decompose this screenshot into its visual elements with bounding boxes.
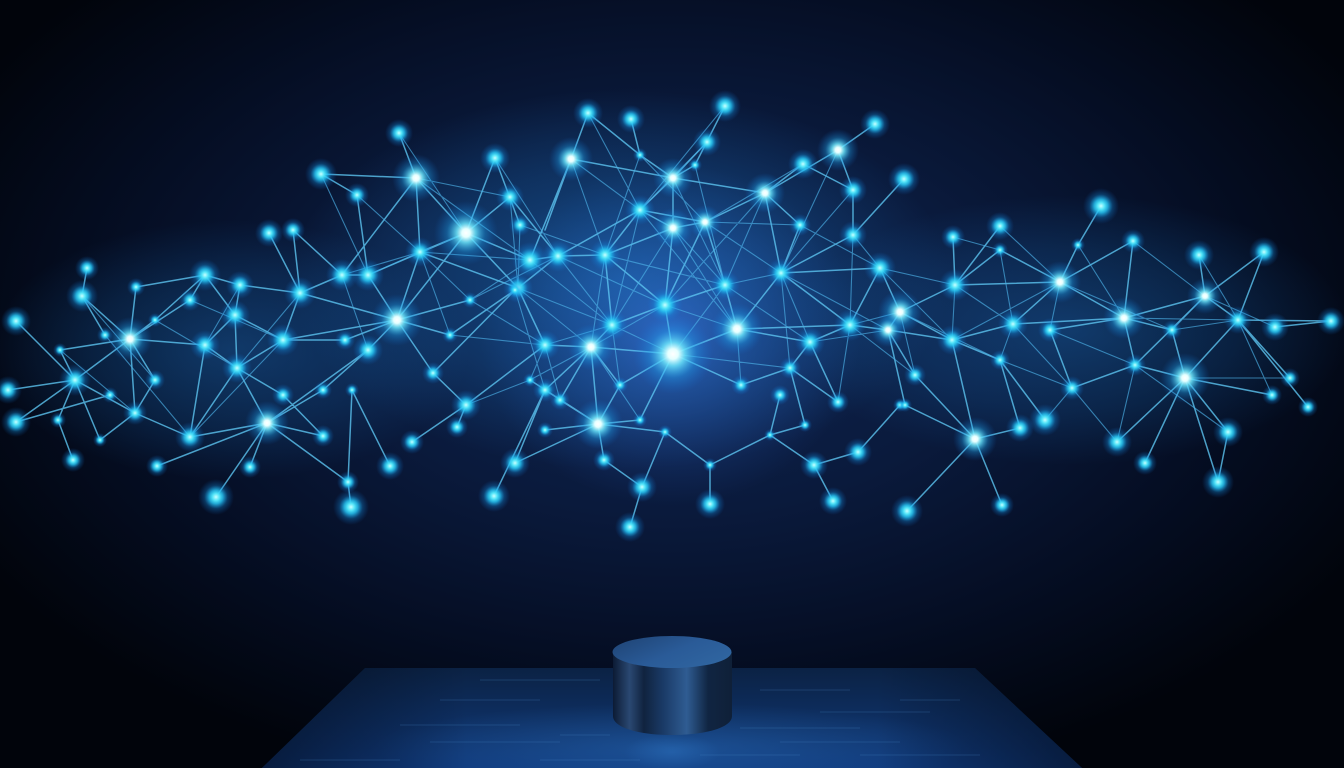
network nodes: small <box>0 90 1344 542</box>
table surface <box>262 668 1082 768</box>
network connections <box>8 106 1331 527</box>
network nodes: bright hubs <box>108 129 1223 461</box>
network cross-links <box>60 106 1290 442</box>
network haze <box>0 90 1344 505</box>
pedestal cylinder <box>612 636 732 735</box>
